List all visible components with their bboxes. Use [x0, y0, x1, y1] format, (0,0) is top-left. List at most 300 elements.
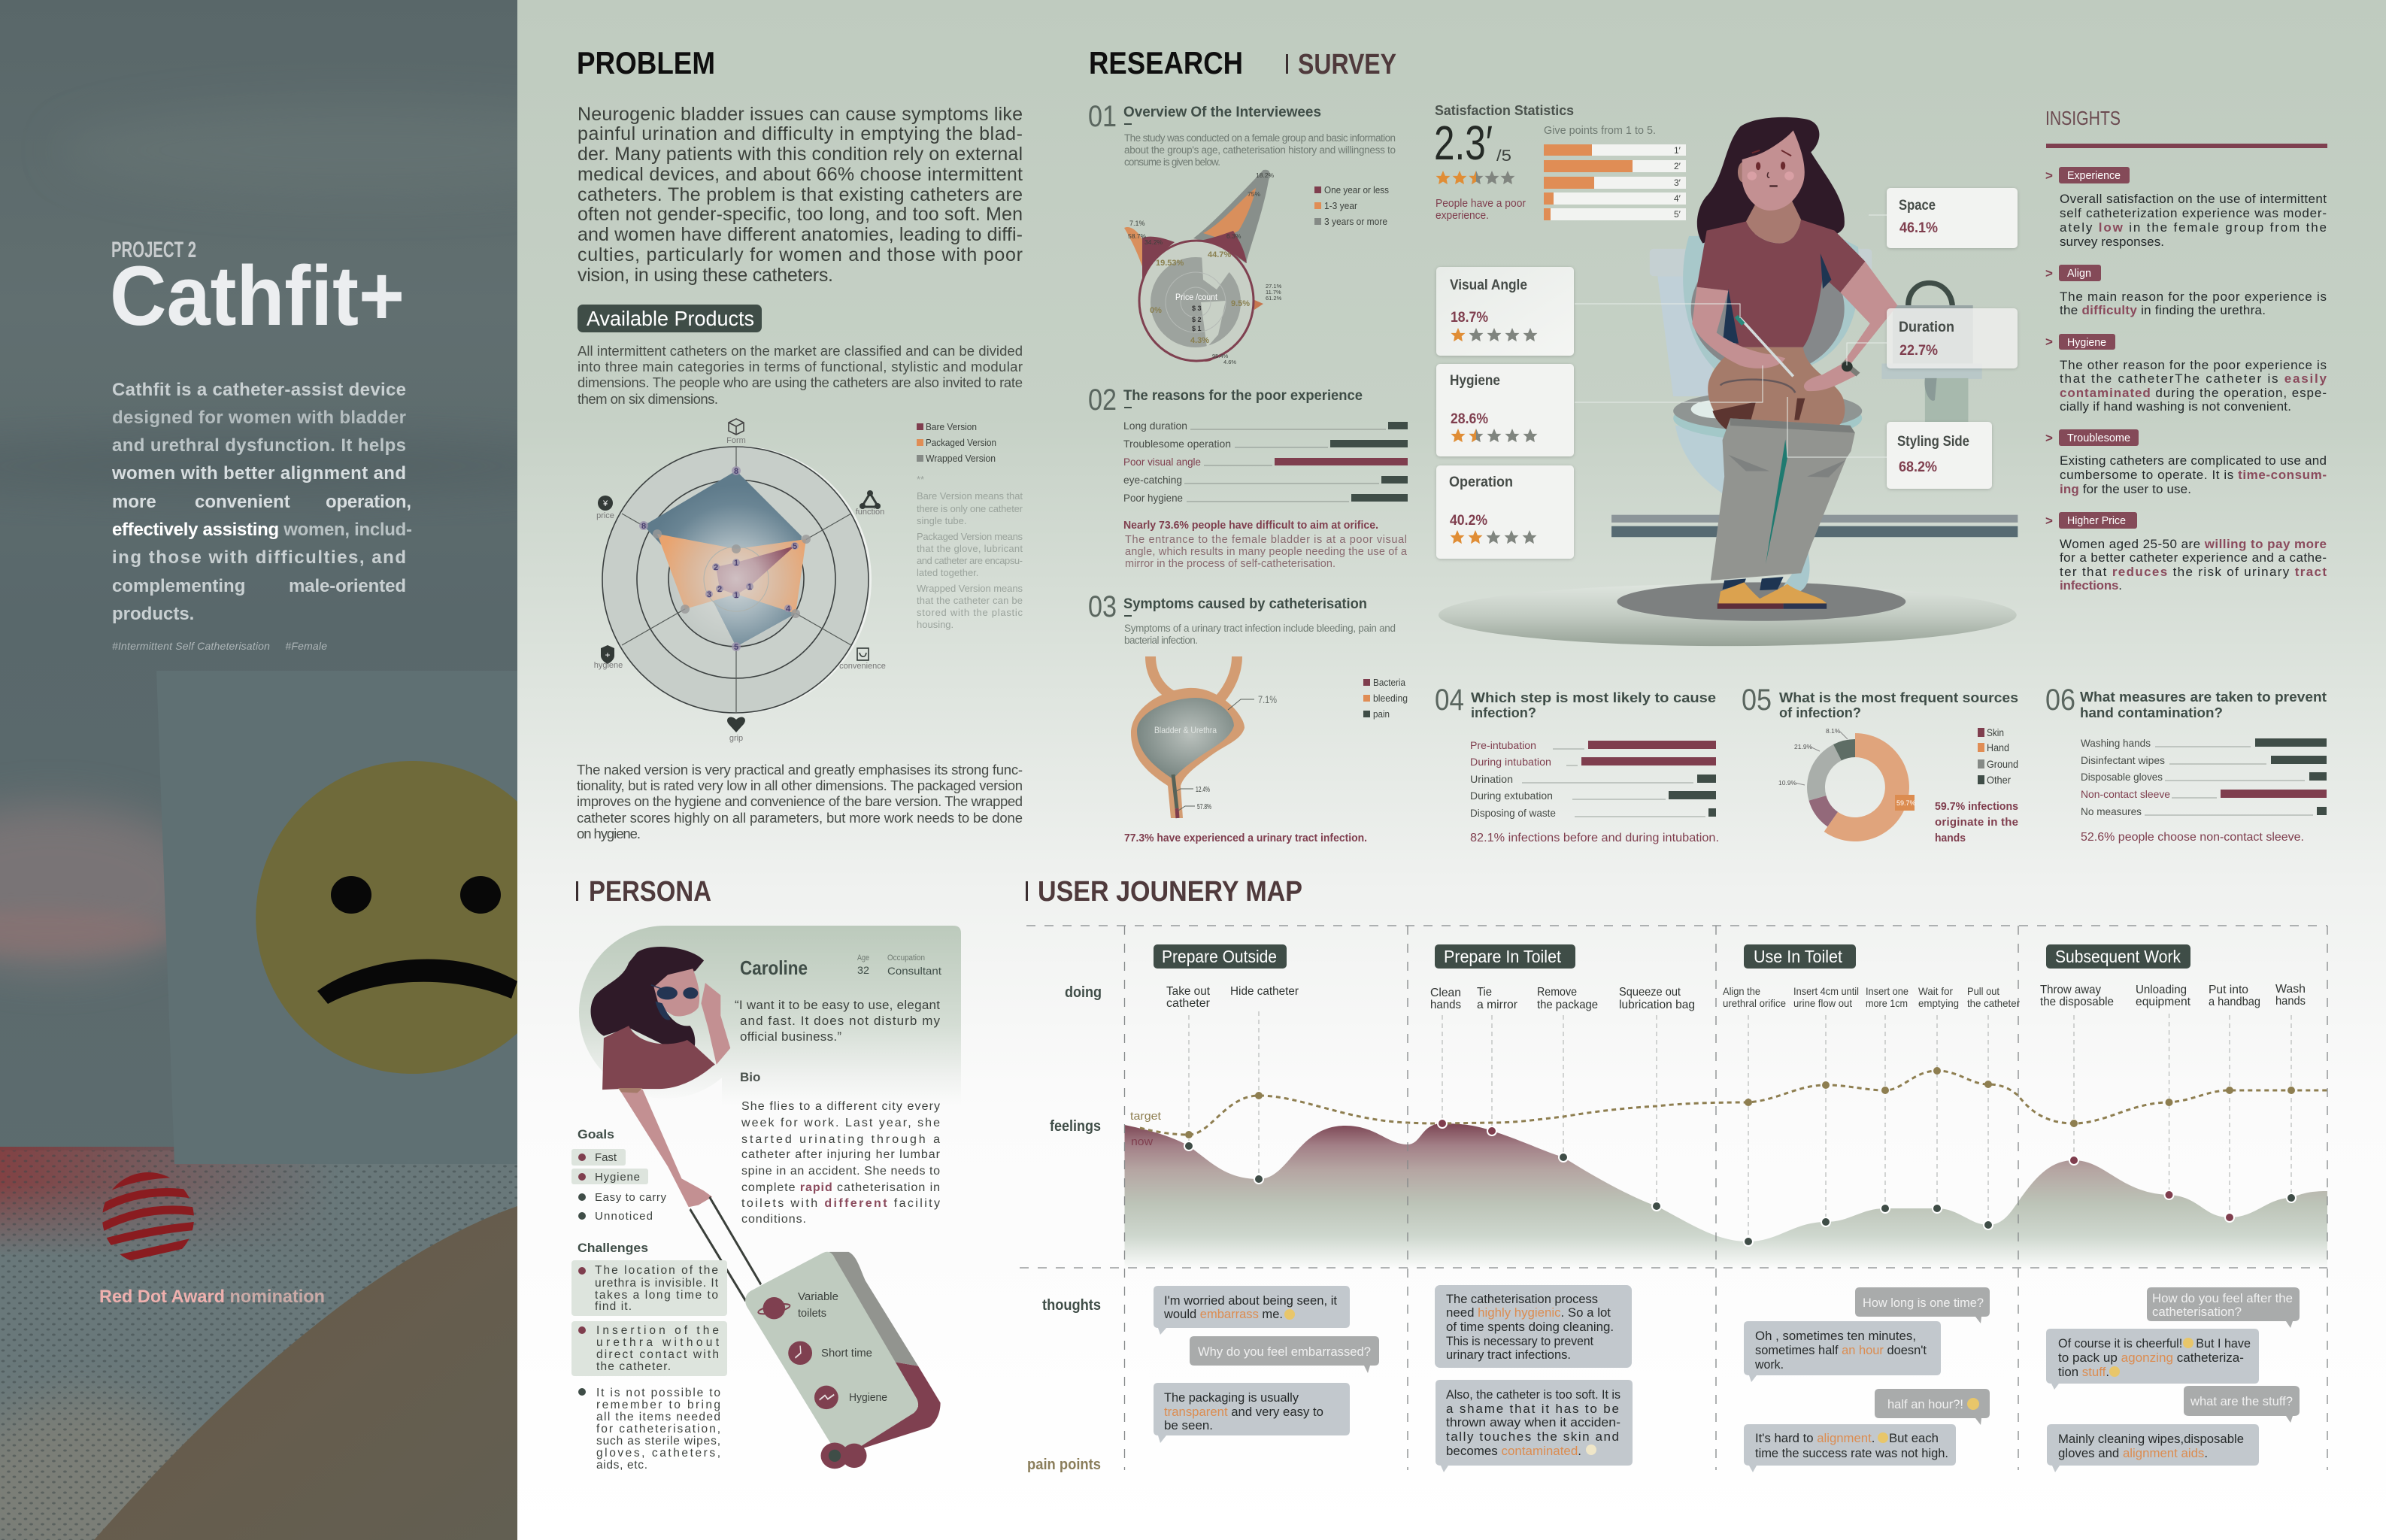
insight: hygiene: that the catheterThe catheter is easily — [2060, 371, 2327, 386]
step labels: doing: Align the — [1723, 985, 1760, 997]
shoes — [1717, 577, 1827, 609]
phase: use in toilet — [1744, 944, 1856, 969]
donut chart: infection sources: 10.9% — [1778, 779, 1797, 787]
persona challenges: urethra without — [596, 1336, 720, 1349]
text block: section 01 — [1124, 132, 1396, 168]
chart: bladder diagram: 57.8% — [1197, 803, 1211, 811]
bubble: feel after: How do you feel after the — [2152, 1291, 2293, 1305]
text block: product conclusion: The naked version is very practical and greatly emphasises its strong func- — [577, 762, 1023, 778]
callout: section 03 finding: 77.3% have experienced a urinary tract infection. — [1124, 832, 1367, 844]
panel: satisfaction statistics: Satisfaction Statistics — [1435, 103, 1574, 118]
bubble: worried about being seen: would embarrass me. — [1163, 1307, 1283, 1321]
hair — [1697, 117, 1845, 244]
section 01 heading: Overview Of the Interviewees — [1123, 105, 1321, 120]
hashtags: #Intermittent Self Catheterisation #Female — [112, 640, 327, 652]
icon: clock — [788, 1341, 812, 1365]
persona challenges: aids, etc. — [596, 1459, 647, 1472]
section 02 heading: The reasons for the poor experience — [1123, 388, 1363, 404]
bubble: packaging transparent: The packaging is usually — [1164, 1390, 1299, 1405]
row labels: doing — [1065, 984, 1102, 1001]
bubble: ten minutes: Oh , sometimes ten minutes, — [1755, 1329, 1916, 1343]
card: hygiene: Hygiene — [1450, 373, 1500, 389]
bubble: catheter too soft: becomes contaminated. — [1446, 1444, 1581, 1458]
legend: symptoms: bleeding — [1373, 693, 1408, 704]
chart points: target — [1130, 1110, 1162, 1123]
chart points — [1130, 1067, 2296, 1246]
bubble: process hygienic: need highly hygienic. So a lot — [1446, 1305, 1611, 1320]
title block: PROJECT 2 — [111, 238, 196, 262]
insight: hygiene: cially if hand washing is not convenient. — [2060, 399, 2291, 414]
chart points: now — [1131, 1135, 1153, 1148]
step labels: doing: Wait for — [1918, 985, 1953, 997]
bubble: hard to align: It's hard to alignment. But each — [1755, 1431, 1939, 1445]
label: available products: Available Products — [587, 307, 754, 330]
bar chart: poor experience reasons: Troublesome operation — [1123, 438, 1231, 450]
insight: experience — [2045, 167, 2327, 249]
persona challenges — [571, 1241, 727, 1472]
step labels: doing: urine flow out — [1793, 997, 1852, 1009]
text block: product conclusion: tionality, but is rated very low in all other dimensions. The packaged version — [577, 778, 1023, 793]
legend: product versions: Bare Version — [926, 421, 977, 432]
bubble: process hygienic — [1435, 1285, 1632, 1368]
icon: hygiene wave — [814, 1386, 838, 1409]
card: duration: Duration — [1899, 320, 1954, 335]
card: styling side: Styling Side — [1897, 434, 1969, 450]
insight: hygiene — [2045, 334, 2327, 414]
step labels: doing: Insert 4cm until — [1793, 985, 1859, 997]
bar chart: poor experience reasons: Long duration — [1123, 420, 1187, 432]
text block: problem statement: catheters. The problem is that existing catheters are — [578, 184, 1023, 205]
bubble: how long: How long is one time? — [1863, 1296, 1984, 1310]
bubble: cheerful — [2046, 1329, 2259, 1390]
icon: hygiene shield: + — [605, 650, 611, 660]
card: visual angle: Visual Angle — [1450, 277, 1527, 293]
persona challenges: such as sterile wipes, — [596, 1435, 720, 1448]
persona goals: Fast — [595, 1151, 617, 1164]
chart: radar of products: convenience — [839, 662, 886, 671]
bubble: packaging transparent: be seen. — [1164, 1418, 1213, 1432]
connector lines — [1575, 215, 1887, 457]
persona bio: She flies to a different city every — [741, 1100, 940, 1113]
persona identity: Consultant — [887, 965, 941, 977]
chart: radar of products: 1 — [734, 591, 738, 600]
panel: satisfaction statistics: People have a poor — [1436, 197, 1526, 210]
insight: hygiene: contaminated during the operation, espe- — [2060, 386, 2327, 400]
persona goals: Goals — [578, 1127, 614, 1141]
insight: higher price: Women aged 25-50 are willing to pay more — [2060, 537, 2327, 551]
chart: interviewees rose: $ 1 — [1192, 325, 1202, 332]
persona challenges: urethra is invisible. It — [595, 1277, 719, 1290]
text block: version notes: that the catheter can be — [917, 595, 1023, 606]
insight: experience: ately low in the female group from the — [2060, 220, 2327, 235]
panel: question 06: 06 — [2045, 684, 2075, 717]
step labels: doing: Put into — [2209, 984, 2248, 996]
bubble: feel after: catheterisation? — [2152, 1305, 2242, 1319]
text block: version notes: stored with the plastic — [917, 607, 1023, 618]
persona quote — [735, 998, 940, 1044]
heading: persona: PERSONA — [589, 876, 711, 908]
bubble: how long — [1855, 1287, 1990, 1323]
donut chart: infection sources: 59.7% — [1896, 799, 1916, 807]
persona challenges: remember to bring — [596, 1399, 720, 1411]
bar chart: score distribution: 2′ — [1674, 161, 1681, 171]
heading: survey: SURVEY — [1298, 49, 1396, 80]
bar chart: score distribution — [1544, 144, 1686, 220]
row labels — [1027, 984, 1102, 1473]
illustration: suitcase — [745, 1252, 941, 1469]
text block: section 01: consume is given below. — [1124, 156, 1220, 168]
legend: sources: Skin — [1987, 726, 2004, 738]
persona goals — [571, 1127, 666, 1223]
chart: interviewees rose: 95.4% — [1212, 353, 1229, 359]
persona bio: complete rapid catheterisation in — [741, 1181, 940, 1194]
bubble: cleaning wipes: gloves and alignment aids. — [2058, 1446, 2208, 1460]
panel: satisfaction statistics: experience. — [1436, 209, 1489, 222]
persona challenges: takes a long time to — [595, 1289, 718, 1302]
suitcase labels: Hygiene — [849, 1392, 887, 1404]
bubble: half an hour — [1875, 1389, 1990, 1425]
illustration: persona woman — [591, 947, 761, 1301]
legend: sources — [1978, 726, 2018, 786]
insight: troublesome — [2045, 429, 2327, 496]
persona bio: Bio — [740, 1070, 760, 1084]
insight: experience: self catheterization experience was moder- — [2060, 206, 2327, 220]
panel: question 05: What is the most frequent sources — [1779, 690, 2018, 705]
bubble: process hygienic: The catheterisation process — [1446, 1292, 1598, 1306]
donut chart: infection sources: 21.9% — [1794, 743, 1813, 750]
bare version polygon — [716, 546, 795, 595]
insight: experience: Overall satisfaction on the use of intermittent — [2060, 192, 2327, 206]
bar chart: poor experience reasons: Poor visual angle — [1123, 456, 1201, 468]
heading: insights: INSIGHTS — [2045, 107, 2121, 129]
bubble: worried about being seen: I'm worried about being seen, it — [1164, 1293, 1337, 1308]
phase: prepare in toilet: Prepare In Toilet — [1444, 947, 1562, 966]
persona quote: and fast. It does not disturb my — [740, 1014, 940, 1028]
insight: align — [2045, 265, 2327, 317]
step labels: doing: more 1cm — [1866, 997, 1908, 1009]
card: hygiene: 28.6% — [1451, 411, 1488, 427]
bubble: why embarrassed — [1190, 1336, 1379, 1373]
step labels: doing: the catheter — [1967, 997, 2020, 1009]
bar chart: infection steps: During intubation — [1470, 756, 1551, 768]
section 03 heading — [1088, 590, 1367, 623]
text block: problem statement: culties, particularly for women and those with poor — [578, 244, 1023, 265]
grid: journey map dashed frame — [1020, 926, 2327, 1470]
section 03 heading: Symptoms caused by catheterisation — [1123, 596, 1367, 612]
persona challenges: The location of the — [595, 1264, 718, 1277]
chart: radar of products: 2 — [717, 585, 722, 594]
bubble: packaging transparent: transparent and very easy to — [1164, 1405, 1323, 1419]
step labels: doing: Clean — [1430, 987, 1461, 999]
chart: interviewees rose: 9.5% — [1231, 299, 1250, 308]
heading: research: RESEARCH — [1089, 45, 1243, 80]
text block: product conclusion: on hygiene. — [577, 826, 641, 841]
chart: interviewees rose: 75% — [1248, 190, 1260, 198]
legend: duration: 1-3 year — [1324, 200, 1358, 211]
persona challenges: direct contact with — [596, 1348, 719, 1361]
bar chart: poor experience reasons: eye-catching — [1123, 474, 1182, 486]
chart: interviewees rose: 58.7% — [1128, 232, 1147, 240]
illustration: woman on toilet — [1439, 117, 2018, 646]
insight: troublesome: > — [2045, 431, 2053, 445]
text block: project description: effectively assisting women, includ- — [112, 520, 412, 540]
text block: problem statement: and women have different anatomies, leading to diffi- — [578, 224, 1023, 245]
legend: duration: One year or less — [1324, 184, 1389, 196]
text block: problem statement: painful urination and difficulty in emptying the blad- — [578, 123, 1023, 144]
persona bio: started urinating through a — [741, 1133, 940, 1146]
bubble: process hygienic: urinary tract infections. — [1446, 1348, 1571, 1362]
bubble: what stuff — [2184, 1386, 2300, 1423]
persona bio: toilets with different facility — [741, 1197, 940, 1210]
bar chart: poor experience reasons: Poor hygiene — [1123, 492, 1183, 504]
step labels: doing: the disposable — [2040, 996, 2114, 1008]
legend: symptoms — [1363, 677, 1408, 720]
chart: interviewees rose: 44.7% — [1208, 250, 1231, 259]
persona goals: Easy to carry — [595, 1191, 666, 1204]
bar chart: infection steps — [1470, 739, 1716, 819]
card: visual angle — [1436, 267, 1574, 356]
title block: Cathfit+ — [110, 249, 405, 343]
insight: align: Align — [2067, 267, 2091, 280]
icon: price — [598, 496, 613, 511]
card: space — [1887, 188, 2018, 248]
text block: problem statement: vision, in using these catheters. — [578, 265, 833, 286]
chart: interviewees rose: 61.2% — [1266, 295, 1282, 302]
bubble: ten minutes: work. — [1754, 1357, 1784, 1372]
panel: question 05: hands — [1935, 832, 1966, 844]
heading: problem: PROBLEM — [577, 45, 715, 80]
chart: interviewees rose: 34.2% — [1144, 238, 1163, 246]
section 02 heading — [1088, 383, 1363, 417]
chart: radar of products: 8 — [734, 467, 738, 476]
bar chart: score distribution: 1′ — [1674, 145, 1681, 156]
section 01 heading: 01 — [1088, 100, 1117, 133]
chart: interviewees rose: 4.6% — [1223, 359, 1236, 365]
text block: project description: Cathfit is a catheter-assist device — [112, 380, 406, 400]
persona challenges: gloves, catheters, — [596, 1447, 720, 1460]
bubble: catheter too soft: Also, the catheter is too soft. It is — [1446, 1387, 1620, 1402]
step labels: doing: a mirror — [1477, 999, 1518, 1011]
toilet — [1650, 232, 1872, 593]
chart: radar of products: 1 — [747, 583, 752, 592]
persona challenges: It is not possible to — [596, 1387, 720, 1399]
chart: feelings target line — [1140, 1071, 2327, 1135]
chart: interviewees rose — [1124, 170, 1282, 365]
insight: experience: survey responses. — [2060, 235, 2164, 249]
chart: radar of products — [594, 419, 886, 743]
text block: version notes: Wrapped Version means — [917, 583, 1023, 594]
suitcase labels: Variable — [798, 1291, 838, 1303]
legend: sources: Other — [1987, 774, 2011, 786]
bar chart: hand protection: Disinfectant wipes — [2081, 754, 2165, 766]
text block: categories: dimensions. The people who are using the catheters are also invited to rate — [578, 374, 1023, 390]
text block: section 01: The study was conducted on a female group and basic information — [1124, 132, 1396, 144]
bubble: half an hour: half an hour?! — [1887, 1397, 1963, 1411]
bar chart: infection steps: Disposing of waste — [1470, 807, 1556, 819]
chart: interviewees rose: 4.3% — [1190, 336, 1209, 345]
bubble: hard to align: time the success rate was not high. — [1755, 1446, 1948, 1460]
text block: categories: into three main categories in terms of functional, stylistic and modular — [578, 359, 1023, 374]
text block: project description: convenient — [195, 492, 290, 512]
text block: version notes: that the glove, lubricant — [917, 543, 1023, 554]
heading: insights — [2045, 107, 2327, 148]
text block: version notes: housing. — [917, 619, 953, 630]
chart: radar of products: hygiene — [594, 661, 623, 670]
insight: higher price: infections. — [2060, 578, 2122, 593]
callout: section 02 finding — [1123, 519, 1408, 570]
panel: question 04: Which step is most likely to cause — [1471, 690, 1716, 705]
text block: product conclusion — [577, 762, 1023, 841]
step labels: doing: Wash — [2275, 983, 2306, 996]
step labels: doing: catheter — [1166, 997, 1211, 1010]
chart: radar of products: 5 — [793, 542, 797, 551]
text block: section 01: about the group's age, catheterisation history and willingness to — [1124, 144, 1396, 156]
heading: user journey map: USER JOUNERY MAP — [1038, 876, 1302, 908]
section 03 heading: 03 — [1088, 590, 1117, 623]
panel: question 04: 82.1% infections before and during intubation. — [1470, 832, 1719, 844]
chart: interviewees rose: 18.2% — [1256, 171, 1275, 179]
chart: radar of products: 8 — [641, 522, 646, 531]
icon: price: ¥ — [602, 499, 608, 508]
text block: version notes: Packaged Version means — [917, 531, 1023, 542]
persona challenges: for catheterisation, — [596, 1423, 720, 1435]
text block: problem statement: der. Many patients with this condition rely on external — [578, 144, 1023, 165]
legend: symptoms: Bacteria — [1373, 677, 1406, 688]
bar chart: poor experience reasons — [1123, 420, 1408, 504]
chart: interviewees rose: $ 2 — [1192, 316, 1202, 323]
section 02 heading: 02 — [1088, 383, 1117, 417]
legend: product versions — [917, 421, 996, 464]
donut chart: infection sources: 8.1% — [1826, 727, 1841, 735]
text block: categories — [578, 343, 1023, 407]
step labels: doing: lubrication bag — [1619, 999, 1695, 1011]
step labels: doing: Tie — [1477, 986, 1492, 999]
bar chart: hand protection: Non-contact sleeve — [2081, 788, 2170, 800]
insight: align: > — [2045, 266, 2053, 280]
panel: satisfaction statistics: Give points from 1 to 5. — [1544, 124, 1656, 137]
bubble: cleaning wipes: Mainly cleaning wipes,disposable — [2058, 1432, 2244, 1446]
icon: sad face — [256, 761, 517, 1074]
ground shadow — [1439, 584, 2017, 646]
panel: photo cover — [0, 0, 517, 1540]
insight: troublesome: Troublesome — [2067, 432, 2130, 444]
text block: project description: ing those with difficulties, and — [112, 547, 406, 568]
chart: interviewees rose: 27.1% — [1266, 283, 1282, 290]
bar chart: hand protection — [2081, 737, 2327, 817]
persona quote: official business.” — [740, 1029, 841, 1044]
insight: experience: Experience — [2067, 169, 2121, 182]
step labels: doing: the package — [1537, 999, 1598, 1011]
step labels: doing: emptying — [1918, 997, 1959, 1009]
persona goals: Unnoticed — [595, 1210, 653, 1223]
bubble: process hygienic: of time spents doing cleaning. — [1446, 1320, 1614, 1334]
bubble: cheerful: Of course it is cheerful! But I have — [2058, 1336, 2251, 1351]
legend: product versions: Wrapped Version — [926, 453, 996, 464]
panel: question 06: 52.6% people choose non-contact sleeve. — [2081, 831, 2304, 844]
legend: product versions: Packaged Version — [926, 437, 996, 448]
persona identity: Age — [857, 953, 869, 962]
chart: radar of products: grip — [729, 734, 743, 743]
text block: project description: and urethral dysfunction. It helps — [112, 435, 406, 456]
legend: duration: 3 years or more — [1324, 216, 1387, 227]
text block: product conclusion: improves on the hygiene and convenience of the bare version. The wrapped — [577, 793, 1023, 809]
chart: interviewees rose: 6.3% — [1226, 232, 1242, 240]
text block: problem statement — [578, 104, 1023, 286]
card: space: 46.1% — [1899, 220, 1938, 236]
persona bio: week for work. Last year, she — [741, 1117, 940, 1129]
card: space: Space — [1899, 198, 1936, 214]
row labels: thoughts — [1042, 1297, 1101, 1314]
panel: satisfaction statistics: /5 — [1496, 147, 1511, 165]
persona goals: Hygiene — [595, 1171, 640, 1184]
panel: question 04: infection? — [1471, 705, 1536, 720]
text block: version notes: there is only one catheter — [917, 503, 1023, 514]
persona identity: Caroline — [740, 956, 808, 979]
text block: project description — [111, 380, 412, 624]
step labels: doing: Take out — [1166, 985, 1211, 998]
persona bio: spine in an accident. She needs to — [741, 1165, 940, 1178]
award label: Red Dot Award nomination — [99, 1287, 325, 1307]
insight: troublesome: cumbersome to operate. It is time-consum- — [2060, 468, 2327, 482]
insight: higher price: > — [2045, 514, 2053, 528]
insight: align: The main reason for the poor experience is — [2060, 290, 2327, 304]
panel: question 04 — [1435, 684, 1719, 844]
persona challenges: find it. — [595, 1300, 632, 1313]
text block: project description: operation, — [326, 492, 411, 512]
legend: symptoms: pain — [1373, 708, 1390, 720]
text block: problem statement: Neurogenic bladder issues can cause symptoms like — [578, 104, 1023, 125]
step labels: doing — [1166, 983, 2306, 1011]
chart: interviewees rose: 7.1% — [1129, 220, 1145, 227]
bubble: catheter too soft: tally touches the skin and — [1446, 1429, 1619, 1444]
step labels: doing: Remove — [1537, 986, 1577, 999]
persona identity: 32 — [857, 964, 869, 976]
persona identity: Occupation — [887, 953, 925, 962]
chart: interviewees rose: 19.53% — [1156, 259, 1184, 268]
chart: bladder diagram: Bladder & Urethra — [1154, 725, 1217, 735]
step labels: doing: Pull out — [1967, 985, 1999, 997]
icon: hygiene shield — [601, 645, 614, 664]
insight: hygiene: Hygiene — [2067, 336, 2106, 349]
step labels: doing: Throw away — [2040, 984, 2101, 996]
step labels: doing: equipment — [2136, 996, 2191, 1008]
section 01 heading — [1088, 100, 1321, 133]
drop lines from steps to curve — [1189, 1011, 2291, 1241]
icon: red dot logo — [102, 1172, 194, 1260]
chart: radar of products: 4 — [786, 605, 791, 614]
text block: project description: women with better alignment and — [111, 463, 406, 484]
bar chart: infection steps: Urination — [1470, 773, 1513, 785]
sign card — [161, 777, 517, 1164]
chart: interviewees rose: $ 3 — [1192, 305, 1202, 312]
insight: troublesome: Existing catheters are complicated to use and — [2060, 453, 2327, 468]
text block: section 03: Symptoms of a urinary tract infection include bleeding, pain and — [1124, 623, 1396, 634]
chart: radar of products: 5 — [734, 643, 738, 652]
chart: radar of products: 2 — [714, 563, 718, 572]
icon: form cube — [729, 419, 744, 435]
face — [1738, 130, 1805, 211]
card: visual angle: 18.7% — [1451, 310, 1488, 326]
row labels: feelings — [1050, 1118, 1101, 1135]
bar chart: hand protection: No measures — [2081, 805, 2142, 817]
card: operation — [1436, 465, 1574, 559]
callout: section 02 finding: mirror in the process of self-catheterisation. — [1125, 558, 1335, 570]
suitcase labels: Short time — [821, 1348, 872, 1360]
text block: problem statement: medical devices, and about 66% choose intermittent — [578, 164, 1023, 185]
persona challenges: Challenges — [578, 1241, 648, 1255]
bubble: worried about being seen — [1154, 1286, 1350, 1335]
legend: duration — [1314, 184, 1389, 227]
